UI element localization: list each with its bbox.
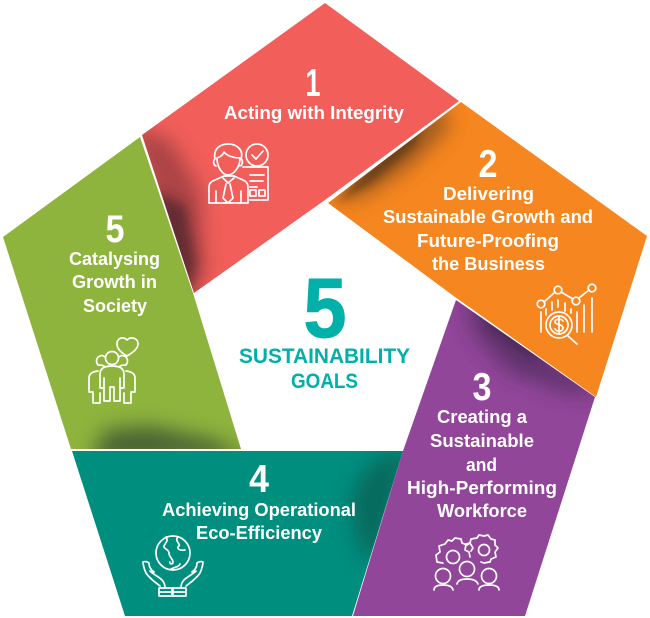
text: delivering sustainable growth and future-proofing the business: the Business bbox=[432, 254, 545, 274]
text: delivering sustainable growth and future-proofing the business: Future-Proofing bbox=[417, 231, 559, 251]
icon: growth chart with magnifier bbox=[537, 284, 596, 344]
icon: hands holding globe bbox=[143, 536, 203, 596]
text: creating a sustainable and high-performing workforce: Creating a bbox=[437, 407, 528, 427]
panel: goal 5 catalysing growth in society bbox=[3, 137, 250, 462]
heading: acting with integrity: Acting with Integrity bbox=[224, 103, 404, 123]
text: delivering sustainable growth and future-proofing the business: Sustainable Growth and bbox=[383, 207, 593, 227]
number 2: 2 bbox=[478, 143, 498, 186]
center title: 5 sustainability goals bbox=[239, 261, 410, 393]
text: catalysing growth in society: Growth in bbox=[72, 272, 157, 292]
text: creating a sustainable and high-performing workforce: High-Performing bbox=[407, 478, 557, 498]
icon: businessman with checklist bbox=[209, 144, 268, 203]
panel: goal 1 acting with integrity bbox=[130, 3, 459, 310]
label: sustainability: SUSTAINABILITY bbox=[239, 345, 410, 368]
number 5: 5 bbox=[106, 208, 124, 251]
icon: family with heart bbox=[89, 338, 138, 403]
text: catalysing growth in society: Catalysing bbox=[69, 249, 160, 269]
text: catalysing growth in society: Society bbox=[83, 296, 147, 316]
text: achieving operational eco-efficiency: Eco-Efficiency bbox=[196, 523, 322, 543]
number 4: 4 bbox=[249, 458, 269, 501]
text: creating a sustainable and high-performing workforce: Sustainable bbox=[430, 431, 534, 451]
panel: goal 3 sustainable workforce bbox=[353, 295, 600, 616]
big number 5: 5 bbox=[304, 261, 346, 355]
text: catalysing growth in society bbox=[69, 249, 160, 316]
text: delivering sustainable growth and future-proofing the business: Delivering bbox=[443, 184, 534, 204]
panel: goal 4 operational eco-efficiency bbox=[72, 445, 412, 616]
text: achieving operational eco-efficiency: Achieving Operational bbox=[162, 500, 356, 520]
text: creating a sustainable and high-performing workforce: Workforce bbox=[437, 501, 527, 521]
text: creating a sustainable and high-performing workforce bbox=[407, 407, 557, 521]
number 1: 1 bbox=[306, 62, 320, 105]
text: creating a sustainable and high-performing workforce: and bbox=[466, 455, 497, 475]
number 3: 3 bbox=[472, 366, 492, 409]
label: goals: GOALS bbox=[291, 370, 358, 393]
panel: goal 2 delivering sustainable growth bbox=[328, 102, 647, 397]
text: delivering sustainable growth and future-proofing the business bbox=[383, 184, 593, 274]
icon: team with gears bbox=[434, 535, 499, 590]
text: achieving operational eco-efficiency bbox=[162, 500, 356, 543]
